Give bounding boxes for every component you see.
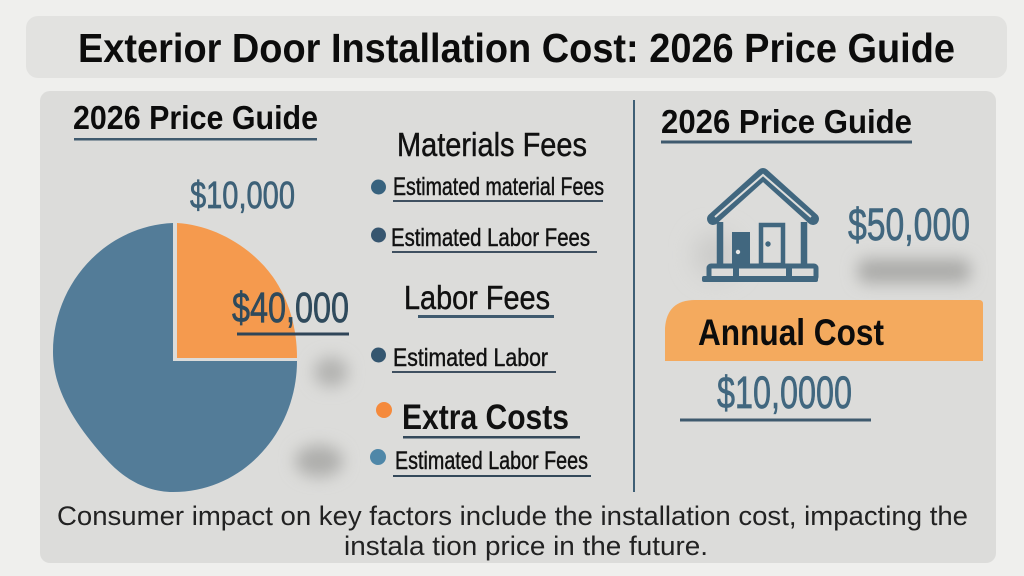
caption: instala tion price in the future. [344,531,708,561]
caption: Consumer impact on key factors include the installation cost, impacting the [57,501,968,531]
banner: annual cost: Annual Cost [698,312,884,353]
label: $40,000: $40,000 [232,284,349,332]
value: $50,000: $50,000 [848,199,970,250]
list: extra costs: Extra Costs [402,398,569,437]
list: materials fees: Estimated Labor Fees [391,224,590,252]
panel: main content [40,91,996,563]
list: labor fees [371,279,556,373]
divider [633,100,635,492]
list: materials fees [371,126,604,253]
banner: annual cost [665,300,983,361]
value: $10,0000 [680,367,871,422]
icon: house [694,174,818,282]
heading: left price guide: 2026 Price Guide [73,99,318,136]
title: Exterior Door Installation Cost: 2026 Price Guide [78,25,955,71]
blurred smudge under value [858,259,970,283]
list: labor fees: Estimated Labor [393,344,548,372]
value: $10,0000: $10,0000 [717,367,852,418]
pie chart [53,223,297,492]
caption [57,501,968,561]
label: $10,000: $10,000 [190,175,295,217]
list: materials fees: Estimated material Fees [393,173,604,201]
blurred smudges beside the pie [295,357,348,477]
title [26,16,1007,78]
list: labor fees: Labor Fees [404,279,550,316]
list: extra costs: Estimated Labor Fees [395,447,588,475]
heading: right price guide: 2026 Price Guide [661,103,912,140]
list: materials fees: Materials Fees [397,126,587,163]
list: extra costs [370,398,591,477]
